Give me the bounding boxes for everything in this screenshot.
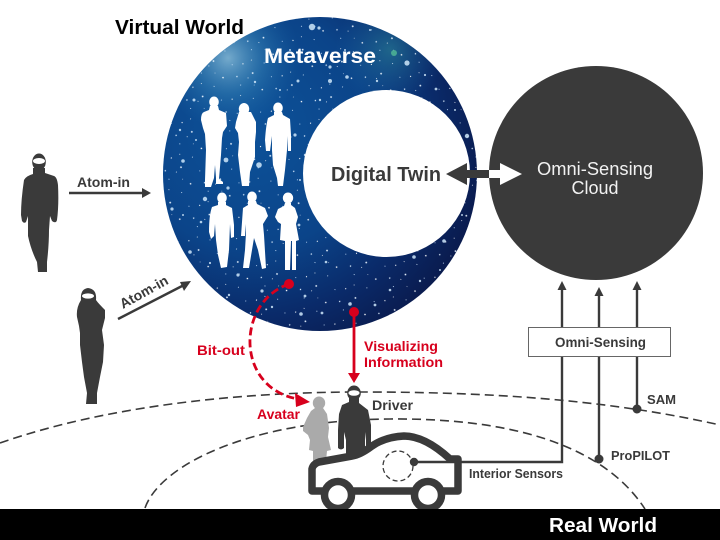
- band: real world: [0, 509, 720, 540]
- box: Omni-Sensing: [528, 328, 670, 356]
- arrow: Atom-in 1: Atom-in: [77, 174, 130, 190]
- arrow: double-headed link between Digital Twin and Cloud: [446, 163, 522, 185]
- inner white circle: Digital Twin: [303, 90, 470, 257]
- arrow: Bit-out dashed: [250, 279, 310, 407]
- white silhouettes: avatars: [201, 96, 299, 270]
- dashed orbit: outer: [0, 392, 720, 443]
- label: Interior Sensors: Interior Sensors: [469, 466, 563, 481]
- avatar 2: [235, 103, 256, 186]
- arrow: Visualizing Information: [348, 307, 360, 383]
- label: Digital Twin: Digital Twin: [331, 164, 441, 186]
- arrow: Atom-in 1: [69, 174, 151, 198]
- label: Bit-out: Bit-out: [197, 342, 245, 358]
- nebula glow: [163, 17, 477, 331]
- panel: Omni-Sensing Cloud: Omni-Sensing: [537, 159, 653, 179]
- band: real world: Real World: [549, 515, 657, 537]
- panel: Metaverse circle: [163, 17, 477, 331]
- panel: Omni-Sensing Cloud: [489, 66, 703, 280]
- label: Visualizing Information: [364, 338, 443, 370]
- label: Driver: Driver: [372, 397, 414, 413]
- sensor lines and arrows: [414, 281, 642, 464]
- avatar 6: [275, 192, 299, 270]
- figure: avatar (grey): [303, 396, 331, 461]
- heading: Virtual World: Virtual World: [115, 17, 244, 39]
- arrow: Atom-in 2: [117, 272, 191, 319]
- figure: man with headset: [21, 154, 58, 272]
- avatar 4: [209, 192, 234, 268]
- label: ProPILOT: ProPILOT: [611, 448, 670, 463]
- label: Avatar: Avatar: [257, 406, 301, 422]
- arrow: Atom-in 2: Atom-in: [117, 272, 171, 312]
- label: Visualizing Information: Visualizing: [364, 338, 438, 354]
- label: Visualizing Information: Information: [364, 354, 443, 370]
- figure: driver: [338, 386, 371, 456]
- avatar 5: [241, 192, 268, 269]
- avatar 3: [265, 102, 291, 186]
- box: Omni-Sensing: Omni-Sensing: [555, 334, 646, 350]
- panel: Omni-Sensing Cloud: Cloud: [571, 178, 619, 198]
- label: Metaverse: Metaverse: [264, 45, 376, 68]
- icon: car: [312, 436, 458, 508]
- figure: woman with headset: [77, 288, 105, 404]
- avatar 1: [201, 96, 227, 187]
- dashed orbit: inner: [145, 419, 645, 509]
- label: SAM: SAM: [647, 392, 676, 407]
